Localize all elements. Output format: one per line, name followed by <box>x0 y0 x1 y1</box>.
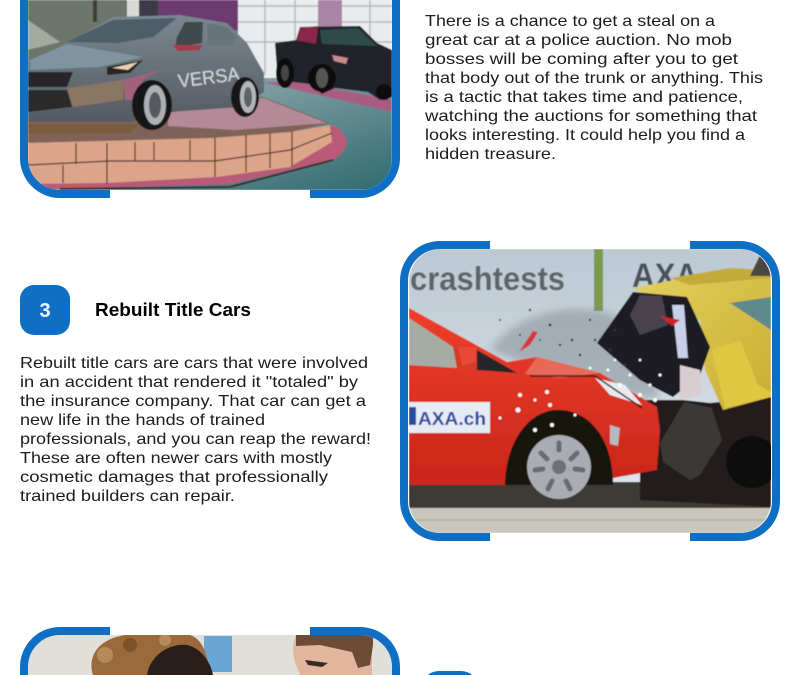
text block: police auction description: great car at a police auction. No mob <box>425 32 732 49</box>
text block: rebuilt title description: new life in the hands of trained <box>20 412 265 429</box>
dark wreck <box>640 397 771 507</box>
text block: rebuilt title description: in an accident that rendered it "totaled" by <box>20 374 358 391</box>
broken windshield <box>597 292 710 397</box>
platform top <box>28 97 330 143</box>
number badge: 3 <box>20 285 70 335</box>
text block: rebuilt title description: cosmetic damages that professionally <box>20 469 328 486</box>
number badge: 3: 3 <box>39 300 51 322</box>
photo: crash test <box>409 249 778 533</box>
red car <box>409 308 660 485</box>
text block: rebuilt title description <box>20 355 371 505</box>
text block: police auction description: is a tactic that takes time and patience, <box>425 89 743 106</box>
text block: rebuilt title description: the insurance company. That car can get a <box>20 393 366 410</box>
frame: blue brackets <box>24 0 396 194</box>
photo: two people <box>28 634 392 675</box>
frame: blue brackets <box>24 631 396 675</box>
text block: police auction description: There is a chance to get a steal on a <box>425 13 715 30</box>
truck <box>275 26 392 100</box>
heading: Rebuilt Title Cars: Rebuilt Title Cars <box>95 299 251 320</box>
photo: showroom cars <box>28 0 392 190</box>
debris specks <box>498 359 662 432</box>
text block: police auction description: bosses will be coming after you to get <box>425 51 739 68</box>
text block: rebuilt title description: Rebuilt title cars are cars that were involved <box>20 355 368 372</box>
text block: police auction description: hidden treasure. <box>425 146 556 163</box>
photo: crash test: AXA <box>632 257 698 295</box>
text block: rebuilt title description: trained builders can repair. <box>20 488 235 505</box>
number badge: next section <box>428 671 472 675</box>
panel: crash test photo <box>404 245 778 537</box>
text block: police auction description: watching the auctions for something that <box>424 108 758 125</box>
frame: blue brackets <box>404 245 776 537</box>
text block: rebuilt title description: These are often newer cars with mostly <box>20 450 332 467</box>
photo: showroom cars: VERSA <box>177 64 241 93</box>
spray haze <box>490 309 660 400</box>
panel: people photo <box>24 631 396 675</box>
sedan <box>28 15 264 122</box>
platform rim <box>28 125 346 190</box>
photo: crash test: AXA.ch <box>418 409 486 429</box>
panel: car auction photo <box>24 0 396 194</box>
text block: rebuilt title description: professionals, and you can reap the reward! <box>20 431 371 448</box>
text block: police auction description: looks interesting. It could help you find a <box>425 127 745 144</box>
text block: police auction description: that body out of the trunk or anything. This <box>425 70 763 87</box>
photo: crash test: crashtests <box>410 260 565 297</box>
text block: police auction description <box>424 13 763 163</box>
yellow car <box>633 277 771 410</box>
ground <box>409 507 771 533</box>
platform bricks <box>28 125 332 184</box>
